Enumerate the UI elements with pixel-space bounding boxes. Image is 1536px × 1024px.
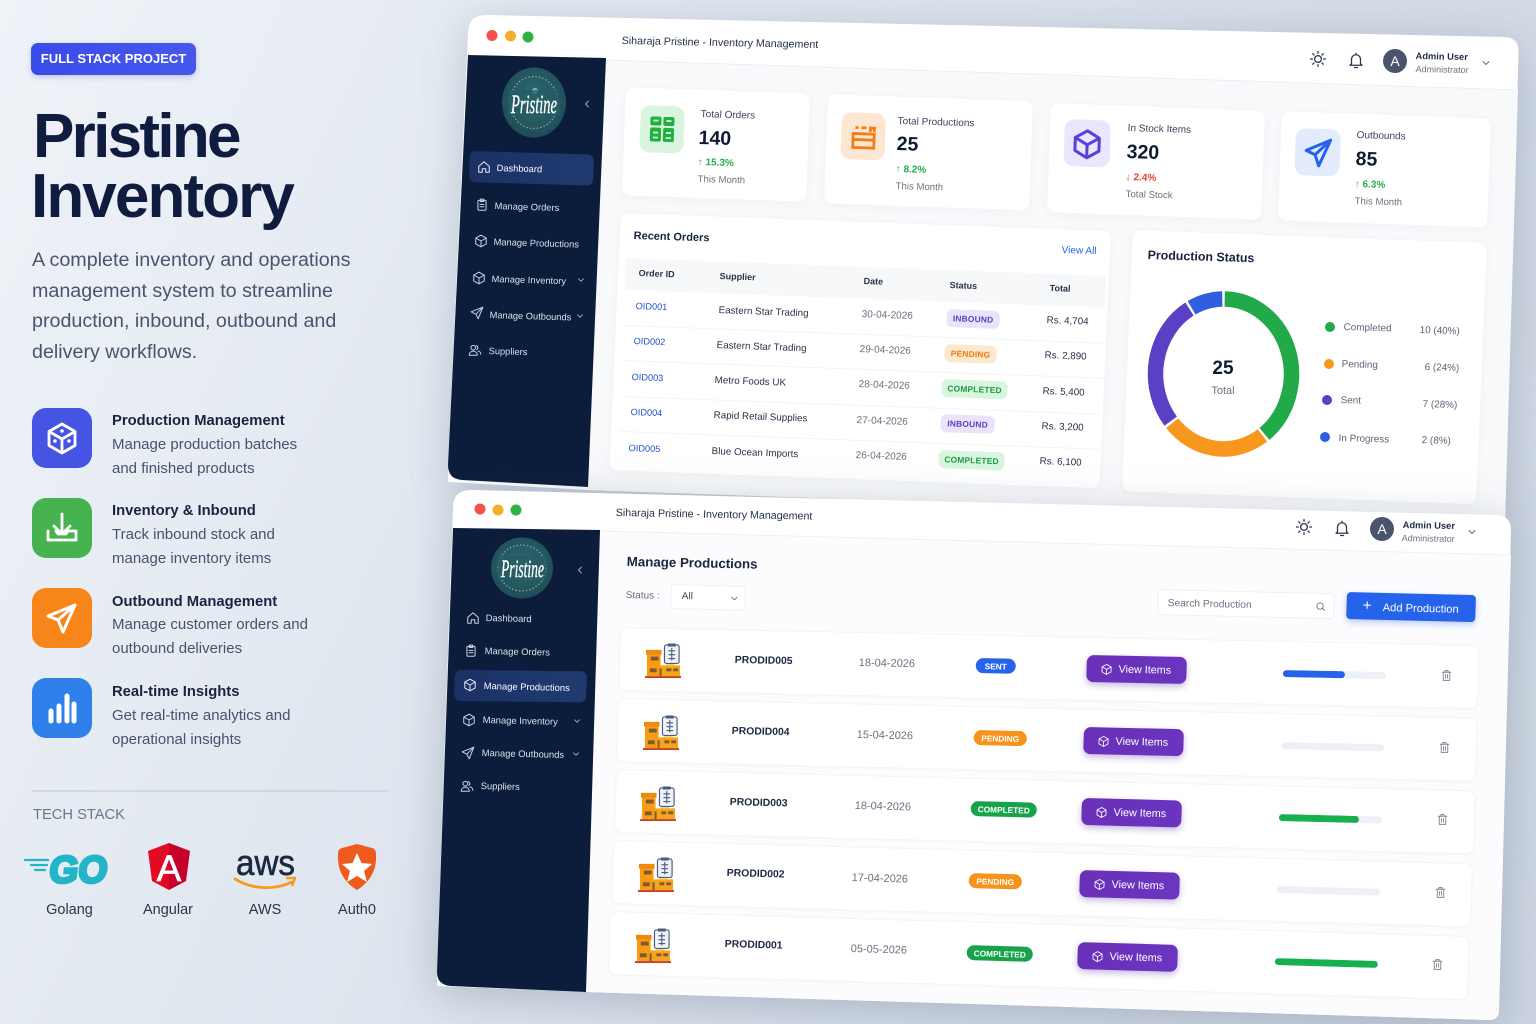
nav: dashboard active <box>469 151 594 186</box>
supplier: Metro Foods UK <box>714 375 786 389</box>
link: view all: View All <box>1061 245 1097 257</box>
avatar <box>1370 517 1394 541</box>
nav label: dashboard: Dashboard <box>486 612 532 624</box>
text <box>112 436 297 476</box>
nav icon: suppliers <box>460 779 474 793</box>
icon tile: productions <box>840 112 886 161</box>
icon: factory <box>645 643 682 680</box>
status badge: PENDING <box>981 733 1019 743</box>
card: outbounds <box>1277 110 1492 229</box>
text: Manage customer orders and <box>112 616 308 633</box>
sidebar logo <box>490 537 554 599</box>
nav icon: outbounds <box>470 306 484 320</box>
icon: search <box>1315 601 1326 612</box>
page heading: Manage Productions <box>627 554 758 572</box>
user name: Admin User <box>1415 51 1468 62</box>
date: 30-04-2026 <box>861 309 913 322</box>
stat change: ↑ 15.3% <box>697 157 734 169</box>
nav icon: orders <box>464 644 478 658</box>
icon tile: orders <box>639 105 685 154</box>
description: management system to streamline <box>32 280 333 302</box>
status badge: PENDING <box>976 876 1014 887</box>
button label: Add Production <box>1383 602 1459 616</box>
button: view items: View Items <box>1113 806 1166 820</box>
traffic lights <box>486 30 534 42</box>
button: view items <box>1086 655 1187 684</box>
button: view items: View Items <box>1109 950 1162 964</box>
label: Angular <box>143 902 193 918</box>
donut chart <box>1148 291 1300 457</box>
left panel <box>24 42 388 918</box>
label: Golang <box>46 902 93 918</box>
status badge <box>938 450 1005 470</box>
legend label: completed: Completed <box>1343 322 1392 334</box>
column: supplier: Supplier <box>719 271 756 282</box>
stat value: 320 <box>1126 141 1160 164</box>
progress bar <box>1281 742 1384 751</box>
status badge <box>946 309 1000 329</box>
button: add production <box>1346 592 1476 622</box>
icon: trash <box>1431 958 1444 971</box>
heading: Real-time Insights <box>112 684 239 700</box>
order row OID002: OID002 <box>633 336 666 347</box>
supplier: Eastern Star Trading <box>718 305 809 319</box>
card: in stock items <box>1046 102 1266 221</box>
donut label: Total <box>1211 385 1235 397</box>
filter select <box>670 584 746 611</box>
legend value: completed: 10 (40%) <box>1419 325 1460 337</box>
nav label: orders: Manage Orders <box>485 645 550 658</box>
user role: Administrator <box>1402 533 1455 544</box>
status badge: INBOUND <box>947 418 988 430</box>
icon: factory <box>638 857 675 894</box>
progress bar <box>1283 670 1386 679</box>
title <box>31 102 294 231</box>
status badge: COMPLETED <box>947 383 1002 395</box>
button: view items <box>1081 798 1182 828</box>
card: total productions <box>823 93 1034 211</box>
status badge <box>976 658 1016 674</box>
button plus: + <box>1362 597 1372 614</box>
row: PRODID005 <box>618 627 1480 709</box>
date: 29-04-2026 <box>859 344 911 357</box>
stat change: ↓ 2.4% <box>1125 172 1156 184</box>
stat value: 85 <box>1355 148 1378 171</box>
progress bar <box>1275 958 1378 968</box>
window frame <box>430 4 1534 526</box>
status badge <box>940 414 995 434</box>
heading: Outbound Management <box>112 594 277 610</box>
icon: download tray <box>32 498 92 558</box>
icon: bar chart <box>32 678 92 738</box>
production id: PRODID005 <box>735 655 793 667</box>
legend value: sent: 7 (28%) <box>1422 399 1457 411</box>
production id: PRODID003 <box>730 797 788 809</box>
stat label: Outbounds <box>1356 130 1406 142</box>
stat label: Total Orders <box>700 109 755 122</box>
supplier: Eastern Star Trading <box>716 340 807 354</box>
text <box>112 707 290 748</box>
badge: full stack project: FULL STACK PROJECT <box>41 51 186 66</box>
progress bar <box>1277 886 1380 896</box>
order row OID005: OID005 <box>628 443 661 454</box>
nav label: inventory: Manage Inventory <box>491 274 566 286</box>
select value: All <box>682 591 693 602</box>
legend dot: completed <box>1325 322 1335 332</box>
icon: chevron <box>1466 526 1478 538</box>
total: Rs. 6,100 <box>1039 456 1082 469</box>
icon: angular shield: A <box>157 848 182 889</box>
search placeholder: Search Production <box>1168 598 1252 611</box>
icon: auth0 shield <box>338 844 376 890</box>
nav icon: productions <box>463 678 477 692</box>
button: view items: View Items <box>1118 663 1171 676</box>
nav icon: orders <box>477 198 487 211</box>
header title: Siharaja Pristine - Inventory Management <box>616 507 813 523</box>
status badge: COMPLETED <box>974 948 1026 959</box>
stat label: Total Productions <box>897 116 975 129</box>
nav label: suppliers: Suppliers <box>488 346 528 357</box>
user name: Admin User <box>1403 520 1455 531</box>
nav label: outbounds: Manage Outbounds <box>489 310 572 322</box>
icon: trash <box>1440 669 1453 682</box>
sidebar logo: Pristine <box>510 90 557 119</box>
nav label: inventory: Manage Inventory <box>483 714 558 727</box>
nav chevron <box>578 278 584 282</box>
text: Get real-time analytics and <box>112 707 290 724</box>
nav icon: productions <box>475 234 487 248</box>
date: 28-04-2026 <box>858 379 910 392</box>
nav icon: home <box>478 161 490 173</box>
production id: PRODID001 <box>725 939 783 952</box>
supplier: Rapid Retail Supplies <box>713 410 808 424</box>
icon: sun <box>1310 50 1326 68</box>
date: 27-04-2026 <box>856 415 908 428</box>
nav icon: home <box>466 611 480 625</box>
status badge <box>971 801 1037 818</box>
text <box>112 526 275 566</box>
logo: Golang <box>24 849 110 918</box>
feature: inventory and inbound <box>32 498 275 566</box>
avatar: A <box>1390 53 1400 69</box>
legend dot: in progress <box>1320 432 1330 442</box>
logo: AWS <box>234 848 296 918</box>
sidebar logo <box>502 68 566 138</box>
date: 18-04-2026 <box>859 657 915 670</box>
status badge: COMPLETED <box>978 804 1030 815</box>
status badge <box>969 873 1022 889</box>
button: view items: View Items <box>1111 878 1164 892</box>
status badge <box>974 730 1027 746</box>
total: Rs. 3,200 <box>1041 421 1084 434</box>
legend label: pending: Pending <box>1341 359 1378 371</box>
nav: productions active <box>454 670 587 702</box>
nav icon: outbounds <box>461 746 475 760</box>
feature: outbound management <box>32 588 308 656</box>
status badge: INBOUND <box>953 313 994 325</box>
description: A complete inventory and operations <box>32 249 350 271</box>
column: order id: Order ID <box>638 268 675 279</box>
nav label: productions: Manage Productions <box>493 237 579 250</box>
order row OID004: OID004 <box>630 407 663 418</box>
text: and finished products <box>112 460 255 476</box>
nav label: orders: Manage Orders <box>494 201 559 213</box>
row: PRODID002 <box>611 840 1473 927</box>
icon: trash <box>1436 813 1449 826</box>
legend dot: sent <box>1322 395 1332 405</box>
title: Pristine <box>33 102 239 171</box>
panel: production status <box>1121 229 1488 505</box>
button: view items <box>1077 942 1178 972</box>
total: Rs. 4,704 <box>1046 315 1089 328</box>
production id: PRODID004 <box>732 726 790 738</box>
card: total orders <box>621 86 811 203</box>
label: Auth0 <box>338 902 376 918</box>
legend value: pending: 6 (24%) <box>1424 362 1459 374</box>
header title: Siharaja Pristine - Inventory Management <box>621 35 819 51</box>
stat note: Total Stock <box>1125 189 1173 201</box>
button: view items: View Items <box>1115 735 1168 748</box>
date: 05-05-2026 <box>851 943 907 957</box>
description <box>32 249 350 363</box>
icon: factory <box>643 715 680 752</box>
status badge <box>944 344 997 364</box>
icon: chevron <box>1482 61 1490 65</box>
donut value: 25 <box>1212 358 1234 378</box>
legend label: sent: Sent <box>1340 395 1361 407</box>
text: Manage production batches <box>112 436 297 453</box>
icon: collapse chevron <box>585 100 589 108</box>
nav icon: inventory <box>462 713 476 727</box>
icon tile: stock <box>1063 119 1111 168</box>
text <box>112 616 308 656</box>
icon: trash <box>1438 741 1451 754</box>
nav icon: inventory <box>473 272 485 284</box>
stat change: ↑ 6.3% <box>1354 179 1385 191</box>
legend label: in progress: In Progress <box>1338 433 1389 446</box>
column: status: Status <box>949 280 977 291</box>
text: outbound deliveries <box>112 640 242 656</box>
nav icon: suppliers <box>468 344 482 356</box>
nav chevron <box>572 716 582 726</box>
icon: bell <box>1349 52 1363 68</box>
production id: PRODID002 <box>727 868 785 881</box>
button: view items <box>1079 870 1180 900</box>
icon: sun <box>1295 518 1313 536</box>
nav label: dashboard: Dashboard <box>496 163 542 174</box>
column: total: Total <box>1049 283 1071 294</box>
logo: Auth0 <box>338 844 376 918</box>
title: Inventory <box>31 162 293 231</box>
icon: factory <box>640 786 677 823</box>
stat note: This Month <box>895 181 943 193</box>
status badge: SENT <box>985 661 1007 671</box>
total: Rs. 2,890 <box>1044 350 1087 363</box>
filter label: Status : <box>626 590 660 602</box>
button: view items <box>1083 727 1184 756</box>
icon: angular shield <box>148 843 190 890</box>
stat value: 25 <box>896 133 919 156</box>
order row OID001: OID001 <box>635 301 668 312</box>
icon: trash <box>1434 886 1447 899</box>
window frame <box>437 490 1512 1022</box>
avatar <box>1383 49 1407 73</box>
icon: factory <box>635 928 672 965</box>
window: dashboard <box>430 4 1534 526</box>
nav chevron <box>577 314 583 318</box>
date: 15-04-2026 <box>857 729 913 742</box>
supplier: Blue Ocean Imports <box>711 446 799 460</box>
table header band <box>625 258 1106 308</box>
heading: Production Management <box>112 413 285 429</box>
status badge <box>967 945 1033 962</box>
nav label: suppliers: Suppliers <box>481 780 520 792</box>
icon: cube <box>32 408 92 468</box>
icon: bell <box>1333 519 1351 537</box>
panel heading: Production Status <box>1147 248 1255 265</box>
date: 26-04-2026 <box>855 450 907 463</box>
user role: Administrator <box>1415 64 1469 75</box>
logo: Angular <box>143 843 193 918</box>
legend value: in progress: 2 (8%) <box>1421 435 1451 447</box>
select chevron <box>729 593 740 604</box>
window: manage productions <box>437 490 1512 1021</box>
icon: collapse chevron <box>574 564 586 576</box>
text: Track inbound stock and <box>112 526 275 543</box>
panel: recent orders <box>608 212 1112 489</box>
stat label: In Stock Items <box>1127 123 1191 136</box>
nav chevron <box>571 749 581 759</box>
icon: paper plane <box>32 588 92 648</box>
text: operational insights <box>112 730 241 748</box>
icon: go: GO <box>47 849 110 891</box>
heading: tech stack: TECH STACK <box>33 807 125 823</box>
avatar: A <box>1377 521 1387 537</box>
status badge <box>941 379 1008 399</box>
column: date: Date <box>863 276 883 287</box>
date: 18-04-2026 <box>855 800 911 813</box>
icon tile: outbounds <box>1294 128 1341 177</box>
heading: Inventory & Inbound <box>112 503 256 519</box>
traffic lights <box>472 502 524 518</box>
order row OID003: OID003 <box>631 372 664 383</box>
stat value: 140 <box>698 127 732 150</box>
label: AWS <box>249 902 281 918</box>
panel heading: Recent Orders <box>633 230 710 244</box>
description: production, inbound, outbound and <box>32 310 336 332</box>
row: PRODID001 <box>608 911 1470 1000</box>
legend dot: pending <box>1324 359 1334 369</box>
nav label: outbounds: Manage Outbounds <box>482 747 564 760</box>
search box <box>1157 589 1335 619</box>
status badge: PENDING <box>951 348 991 360</box>
row: PRODID003 <box>614 769 1476 854</box>
status badge: COMPLETED <box>944 454 999 466</box>
sidebar logo: Pristine <box>500 556 544 583</box>
text: manage inventory items <box>112 550 271 566</box>
badge: full stack project <box>31 43 196 75</box>
stat note: This Month <box>697 174 745 186</box>
nav label: productions: Manage Productions <box>484 680 570 693</box>
progress bar <box>1279 814 1382 824</box>
stat note: This Month <box>1354 196 1402 208</box>
feature: production management <box>32 408 297 476</box>
feature: real-time insights <box>32 678 290 748</box>
date: 17-04-2026 <box>852 872 908 886</box>
stat change: ↑ 8.2% <box>895 164 926 176</box>
description: delivery workflows. <box>32 341 197 363</box>
row: PRODID004 <box>616 698 1478 782</box>
total: Rs. 5,400 <box>1042 386 1085 399</box>
